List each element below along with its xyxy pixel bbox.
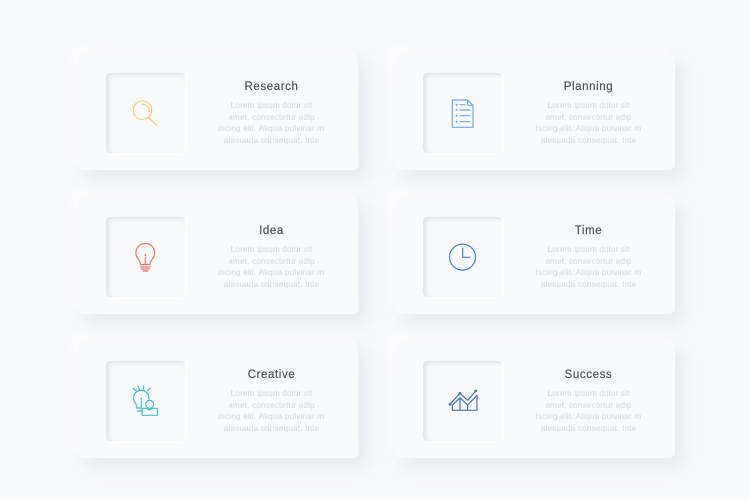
body text: Creative: iscing elit. Aliqua pulvinar m [219,411,324,421]
body text: Idea: amet, consectetur adip [228,256,315,266]
body text: Research: iscing elit. Aliqua pulvinar m [219,123,324,133]
body text: Research [219,100,324,145]
body text: Planning: amet, consectetur adip [545,112,632,122]
body text: Creative: Lorem ipsum dolor sit [231,388,312,398]
body text: Planning: alesuada consequat. Inte [541,135,636,145]
heading: Success: Success [565,369,612,381]
heading: Creative: Creative [248,369,295,381]
body text: Time: amet, consectetur adip [545,256,632,266]
body text: Success: alesuada consequat. Inte [541,423,636,433]
body text: Idea: alesuada consequat. Inte [224,279,319,289]
body text: Time: alesuada consequat. Inte [541,279,636,289]
card: Success [395,341,675,458]
body text: Success: iscing elit. Aliqua pulvinar m [536,411,641,421]
heading: Research: Research [244,81,299,93]
card: Research [78,53,358,170]
icon well: magnifying glass [106,73,185,153]
body text: Creative: amet, consectetur adip [228,400,315,410]
card: Idea [78,197,358,314]
body text: Success [536,388,641,433]
body text: Research: amet, consectetur adip [228,112,315,122]
icon well: document list [423,73,502,153]
body text: Idea: iscing elit. Aliqua pulvinar m [219,267,324,277]
icon well: clock [423,217,502,297]
heading: Planning: Planning [564,81,613,93]
body text: Time [536,244,641,289]
card: Planning [395,53,675,170]
card: Time [395,197,675,314]
icon well: bulb and person [106,361,185,441]
card: Creative [78,341,358,458]
icon well: growth chart [423,361,502,441]
body text: Idea [219,244,324,289]
body text: Success: Lorem ipsum dolor sit [548,388,629,398]
body text: Time: iscing elit. Aliqua pulvinar m [536,267,641,277]
body text: Research: alesuada consequat. Inte [224,135,319,145]
body text: Idea: Lorem ipsum dolor sit [231,244,312,254]
body text: Creative: alesuada consequat. Inte [224,423,319,433]
body text: Success: amet, consectetur adip [545,400,632,410]
body text: Creative [219,388,324,433]
body text: Planning: iscing elit. Aliqua pulvinar m [536,123,641,133]
body text: Time: Lorem ipsum dolor sit [548,244,629,254]
body text: Planning: Lorem ipsum dolor sit [548,100,629,110]
heading: Idea: Idea [259,225,284,237]
body text: Planning [536,100,641,145]
heading: Time: Time [575,225,602,237]
icon well: light bulb [106,217,185,297]
body text: Research: Lorem ipsum dolor sit [231,100,312,110]
